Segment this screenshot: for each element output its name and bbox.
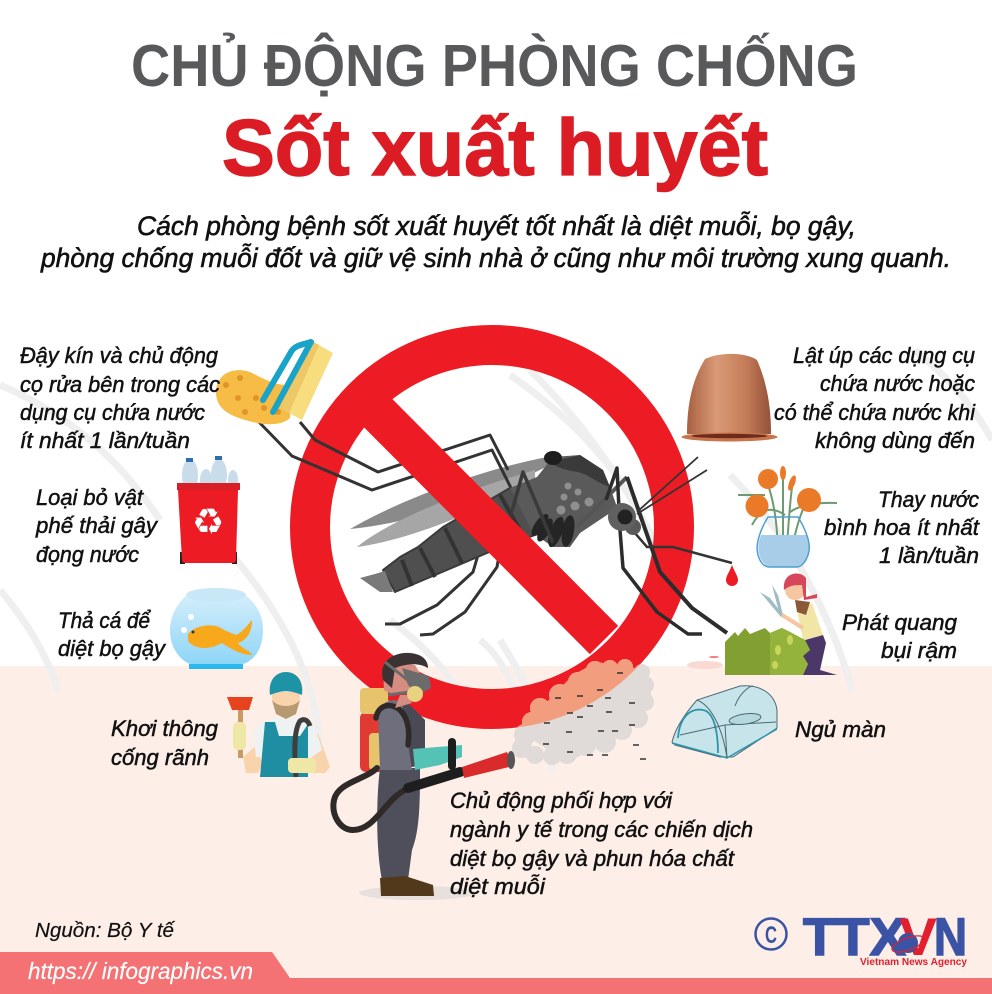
icon: worker with plunger [227,672,330,777]
right labels: Ngủ màn [795,717,886,742]
icon: mosquito [257,420,732,635]
right labels: chứa nước hoặc [820,371,975,396]
right labels: 1 lần/tuần [879,543,979,568]
right labels: không dùng đến [815,428,975,453]
abdomen [383,488,560,592]
leg bases [528,511,577,549]
icon: fish bowl [170,588,263,669]
copyright symbol: C [765,922,777,949]
left labels: cọ rửa bên trong các [20,372,220,397]
icon: copper cup [682,354,778,442]
footer bar with url tab [0,952,992,994]
icon: spray cloud [512,659,654,765]
subtitle text: phòng chống muỗi đốt và giữ vệ sinh nhà ở cũng như môi trường xung quanh. [40,242,951,273]
thorax [510,455,617,547]
logo: TTXVN: TTX [803,908,906,967]
proboscis [634,532,732,563]
left labels: ít nhất 1 lần/tuần [20,428,190,453]
left labels [20,343,220,770]
footer bar with url tab: https:// infographics.vn [28,958,253,984]
left labels: Loại bỏ vật [36,485,144,510]
subtitle text: Cách phòng bệnh sốt xuất huyết tốt nhất là diệt muỗi, bọ gậy, [137,210,856,241]
left labels: Khơi thông [111,716,219,741]
prohibition bar [374,409,604,640]
bottom label [450,788,753,899]
title [131,32,858,192]
antennae [637,457,707,514]
logo: TTXVN: N [934,908,967,967]
wings [350,457,548,529]
logo: TTXVN [803,908,967,968]
heading line 2: Sốt xuất huyết [222,103,768,192]
front legs [510,468,727,634]
logo: TTXVN: Vietnam News Agency [860,956,967,968]
copyright symbol [756,918,786,950]
right labels [774,343,980,742]
right labels: Lật úp các dụng cụ [793,343,975,368]
right labels: Phát quang [842,610,958,635]
left labels: Đậy kín và chủ động [20,343,219,368]
prohibition ring [310,345,674,709]
left labels: dụng cụ chứa nước [20,400,205,425]
left labels: Thả cá để [58,608,152,633]
heading line 1: CHỦ ĐỘNG PHÒNG CHỐNG [131,32,858,99]
subtitle text [40,210,951,273]
icon: blood drop [726,565,738,586]
bottom label: diệt muỗi [450,874,546,899]
pink ground band [0,666,992,978]
tail [360,571,393,592]
legs [257,420,512,635]
source: Nguồn: Bộ Y tế [35,920,176,942]
icon: mosquito net [672,686,777,758]
left labels: cống rãnh [111,745,209,770]
icon: sponge and brush [216,340,333,424]
bottom label: diệt bọ gậy và phun hóa chất [450,846,735,871]
icon: woman trimming bush [687,574,837,675]
icon: sprayer man [333,653,515,900]
right labels: Thay nước [878,487,979,512]
logo: TTXVN: V [899,908,937,967]
head [625,519,641,535]
icon: flowers in vase [738,466,837,567]
right labels: bụi rậm [881,638,957,663]
icon: recycling bin with bottles: ♻ [192,501,224,542]
right labels: có thể chứa nước khi [774,400,976,425]
icon: recycling bin with bottles [177,456,240,564]
left labels: đọng nước [36,542,139,567]
bottom label: Chủ động phối hợp với [450,788,673,813]
left labels: phế thải gây [35,513,159,538]
right labels: bình hoa ít nhất [824,515,980,540]
bottom label: ngành y tế trong các chiến dịch [450,817,753,842]
left labels: diệt bọ gậy [58,636,167,661]
